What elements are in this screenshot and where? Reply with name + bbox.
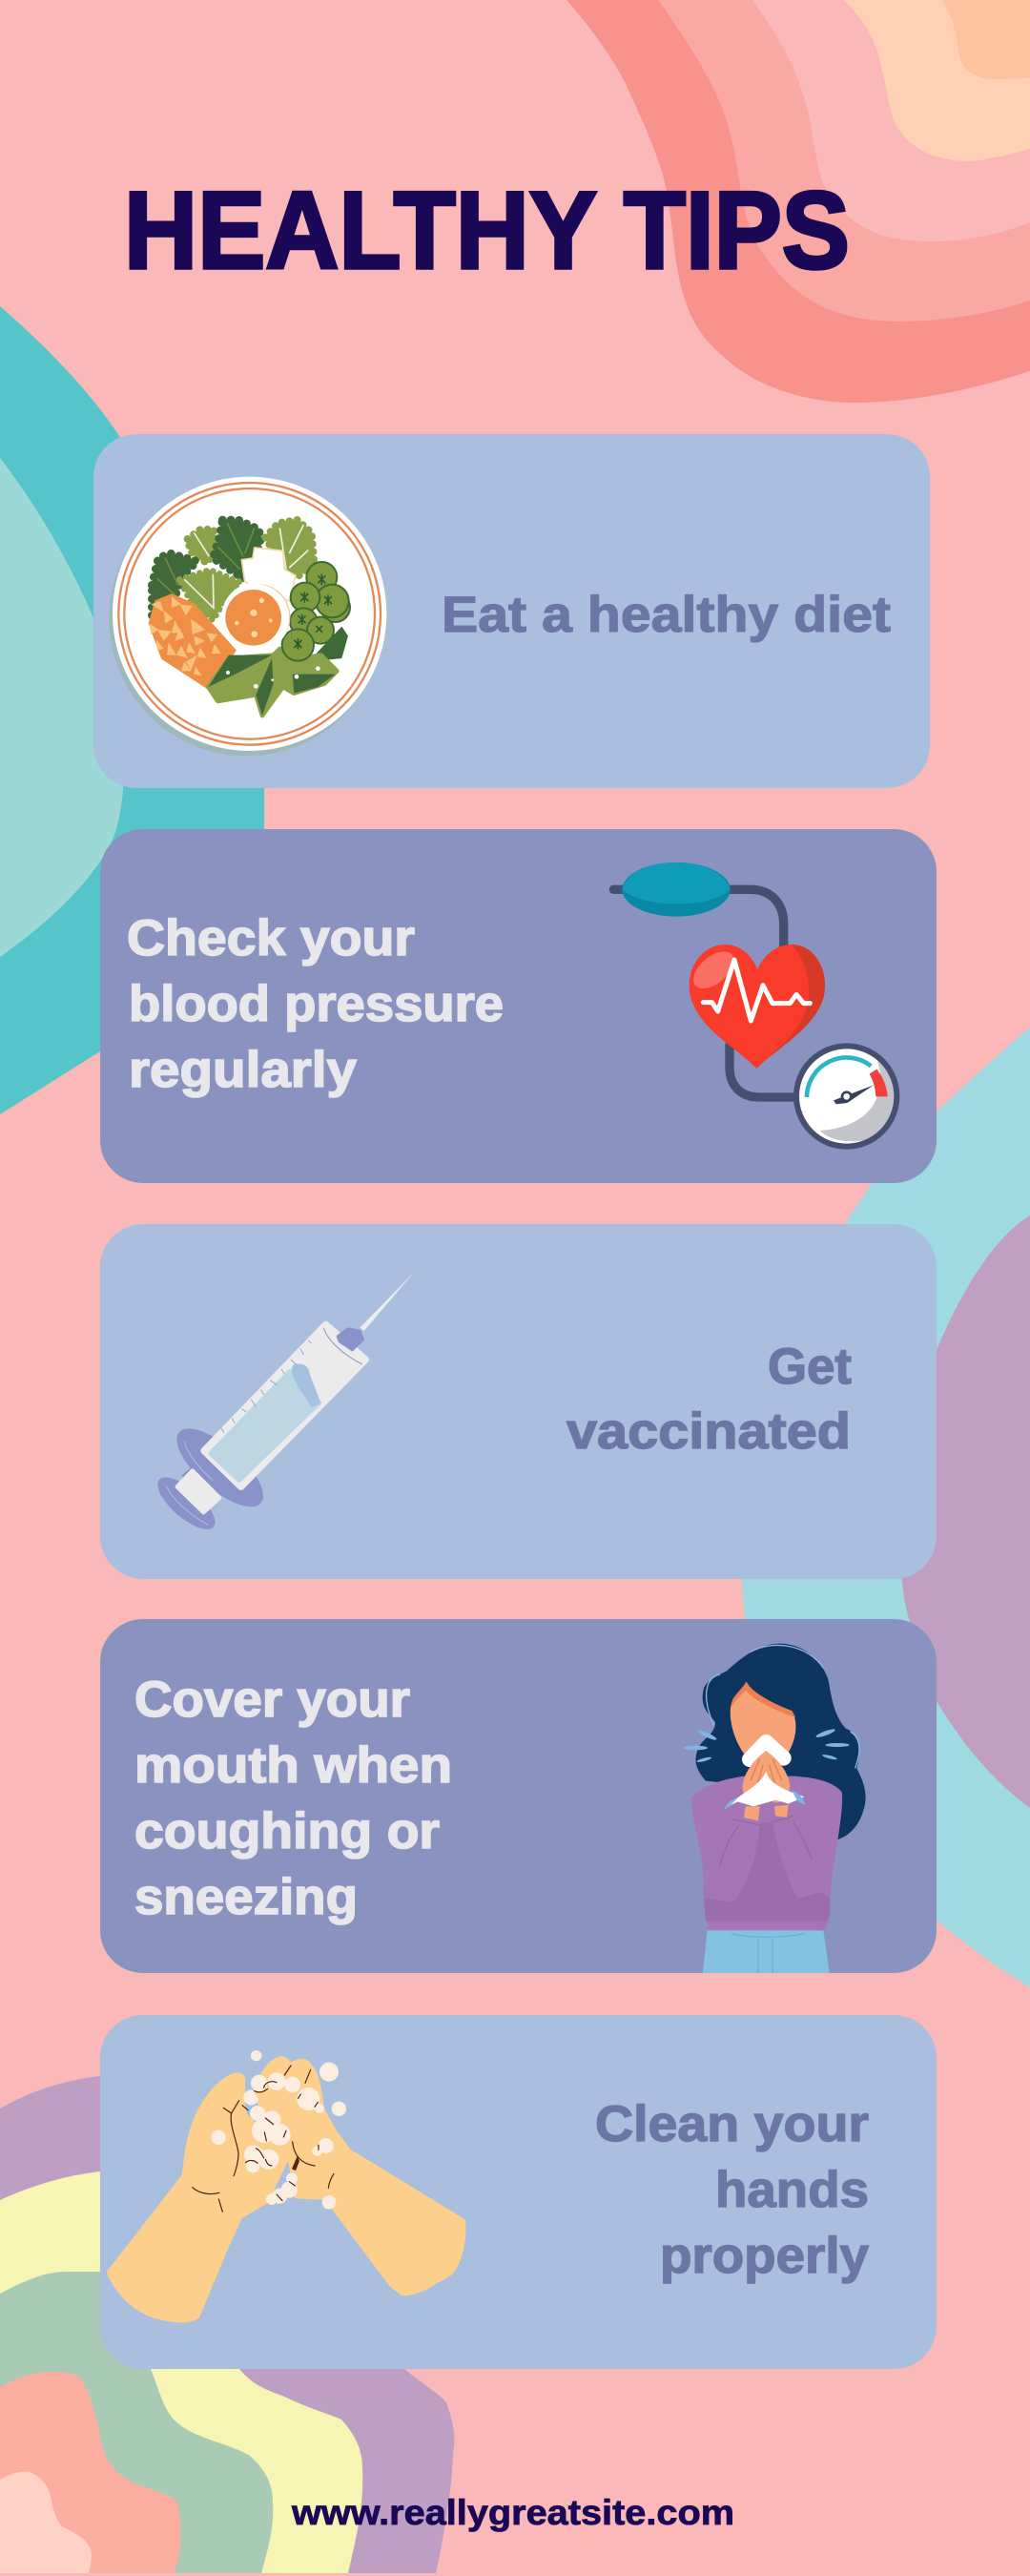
icon: syringe <box>150 1273 413 1538</box>
label: check your blood pressure regularly: blood pressure <box>129 976 504 1032</box>
background waves: right aqua and mauve <box>742 1028 1030 1987</box>
footer website: www.reallygreatsite.com <box>291 2493 734 2532</box>
panel: get vaccinated <box>100 1224 937 1579</box>
icon: salad plate <box>109 477 386 756</box>
icon: washing hands with soap <box>108 2050 464 2321</box>
label: cover your mouth when coughing or sneezing: coughing or <box>134 1803 440 1859</box>
icon: woman sneezing into tissue <box>684 1644 866 1974</box>
soap bubbles and foam blobs <box>211 2050 346 2210</box>
panel: clean your hands <box>100 2015 937 2369</box>
icon: blood pressure heart and gauge <box>613 862 899 1147</box>
label: cover your mouth when coughing or sneezing: Cover your <box>134 1672 410 1728</box>
label: check your blood pressure regularly <box>127 910 504 1098</box>
label: get vaccinated: Get <box>768 1339 852 1395</box>
label: cover your mouth when coughing or sneezing <box>134 1672 452 1925</box>
label: clean your hands properly: Clean your <box>595 2096 869 2152</box>
title: HEALTHY TIPS <box>124 170 850 292</box>
background waves: top right <box>566 0 1030 403</box>
label: get vaccinated: vaccinated <box>566 1403 851 1460</box>
background waves: left teal <box>0 306 264 1114</box>
label: get vaccinated <box>566 1339 852 1460</box>
label: eat a healthy diet: Eat a healthy diet <box>442 587 891 643</box>
label: cover your mouth when coughing or sneezing: sneezing <box>134 1869 358 1925</box>
foam ring behind fingers <box>243 2072 324 2121</box>
label: cover your mouth when coughing or sneezing: mouth when <box>134 1737 452 1794</box>
label: clean your hands properly: properly <box>660 2228 870 2284</box>
label: clean your hands properly <box>595 2096 870 2284</box>
label: check your blood pressure regularly: regularly <box>129 1042 358 1098</box>
panel: cover your mouth <box>100 1619 937 1974</box>
panel: eat a healthy diet <box>93 434 930 788</box>
label: clean your hands properly: hands <box>715 2162 869 2218</box>
background waves: bottom left <box>0 2076 454 2573</box>
panel: check blood pressure <box>100 829 937 1183</box>
label: check your blood pressure regularly: Check your <box>127 910 415 966</box>
